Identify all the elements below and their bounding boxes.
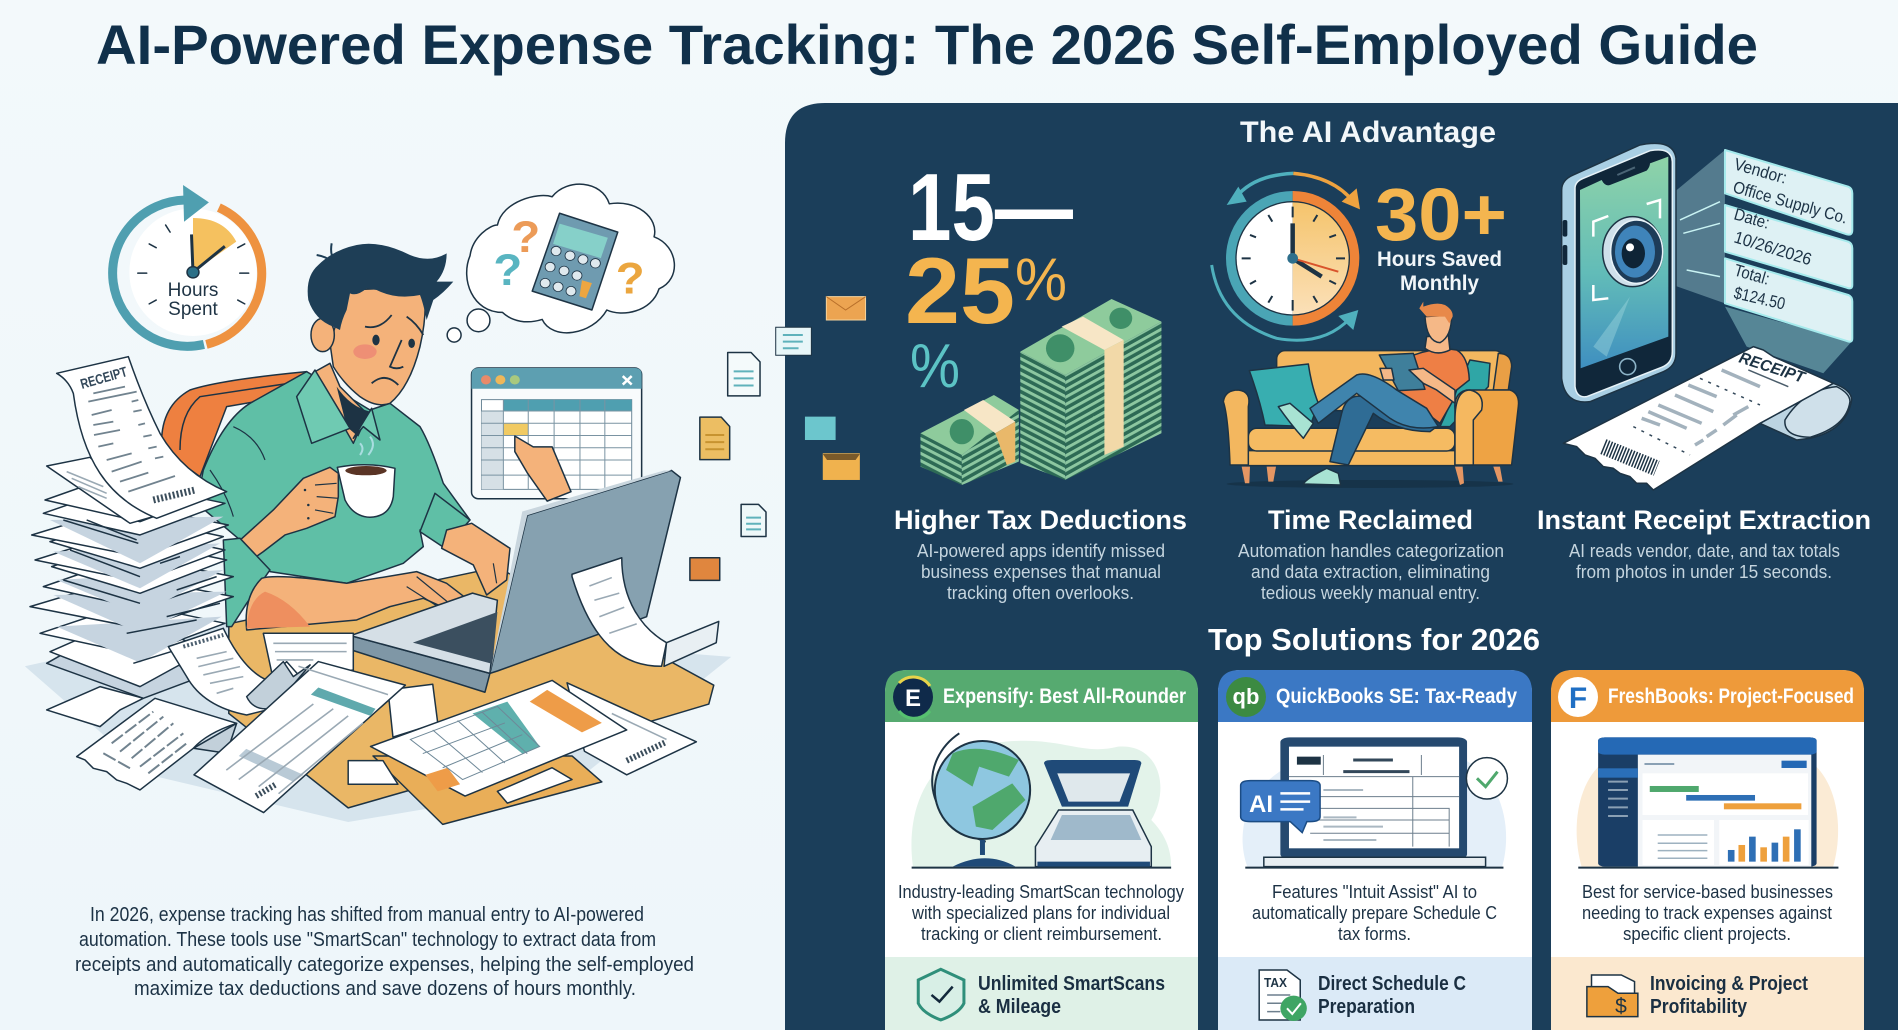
panel: time reclaimed illustration bbox=[1212, 173, 1519, 488]
extracted data panels bbox=[1725, 150, 1852, 342]
card description: tracking or client reimbursement. bbox=[921, 924, 1162, 944]
benefit: time reclaimed: Time Reclaimed bbox=[1268, 505, 1473, 535]
tax label: TAX bbox=[1264, 975, 1287, 990]
stat: 15-25 percent: 25 bbox=[905, 238, 1015, 343]
heading: top solutions: Top Solutions for 2026 bbox=[1208, 622, 1540, 657]
card description bbox=[1252, 882, 1497, 944]
benefit: time reclaimed: Automation handles categorization bbox=[1238, 541, 1504, 561]
card feature: Preparation bbox=[1318, 996, 1415, 1018]
intro paragraph: In 2026, expense tracking has shifted from manual entry to AI-powered bbox=[90, 904, 644, 926]
hours spent label: Hours bbox=[168, 280, 218, 301]
card footer bbox=[885, 957, 1198, 1030]
benefit: higher tax deductions: tracking often overlooks. bbox=[947, 583, 1134, 603]
card feature bbox=[1650, 973, 1808, 1018]
panel: FreshBooks card bbox=[1551, 670, 1864, 1030]
benefit: instant receipt extraction: from photos in under 15 seconds. bbox=[1576, 562, 1832, 582]
panel: left illustration of stressed freelancer bbox=[25, 184, 766, 824]
paper stack bbox=[30, 470, 233, 698]
benefit: time reclaimed: and data extraction, eliminating bbox=[1251, 562, 1490, 582]
icon: invoice folder bbox=[1587, 975, 1638, 1017]
card header bbox=[885, 670, 1198, 722]
man: arms and coffee cup bbox=[223, 437, 510, 630]
card description: Best for service-based businesses bbox=[1582, 882, 1833, 902]
card description: Features "Intuit Assist" AI to bbox=[1272, 882, 1477, 902]
icon: tax document bbox=[1259, 970, 1307, 1021]
card feature: Unlimited SmartScans bbox=[978, 973, 1165, 995]
chair bbox=[162, 372, 307, 477]
panel: phone scanning illustration bbox=[1562, 143, 1852, 490]
card title: FreshBooks: Project-Focused bbox=[1608, 685, 1854, 708]
loose receipts bbox=[47, 628, 353, 790]
hours spent label bbox=[168, 280, 219, 320]
card feature: Direct Schedule C bbox=[1318, 973, 1466, 995]
icon: documents crossing into the panel and cash stacks bbox=[776, 297, 1161, 485]
benefit: time reclaimed: tedious weekly manual entry. bbox=[1261, 583, 1480, 603]
stat: 15-25 percent: % bbox=[910, 332, 960, 401]
icon: thought bubble with calculator bbox=[447, 184, 674, 342]
intro paragraph: automation. These tools use "SmartScan" technology to extract data from bbox=[79, 929, 656, 951]
card title: QuickBooks SE: Tax-Ready bbox=[1276, 685, 1517, 708]
illustration: project dashboard bbox=[1577, 737, 1838, 868]
title: AI-Powered Expense Tracking: The 2026 Self-Employed Guide bbox=[96, 13, 1758, 76]
card footer bbox=[1218, 957, 1532, 1030]
benefit: higher tax deductions: AI-powered apps identify missed bbox=[917, 541, 1165, 561]
card footer bbox=[1551, 957, 1864, 1030]
receipt bbox=[1563, 347, 1852, 490]
benefit: higher tax deductions bbox=[894, 505, 1187, 603]
hours spent label: Spent bbox=[168, 299, 219, 320]
panel: Expensify card bbox=[885, 670, 1198, 1030]
logo: Expensify: E bbox=[905, 685, 921, 712]
logo: Expensify bbox=[893, 677, 933, 718]
stat: 30+ hours saved monthly: Monthly bbox=[1400, 272, 1479, 295]
card description: tax forms. bbox=[1338, 924, 1411, 944]
card description: needing to track expenses against bbox=[1582, 903, 1832, 923]
icon: hours spent clock bbox=[113, 185, 262, 346]
card feature: Invoicing & Project bbox=[1650, 973, 1808, 995]
receipt extraction labels: Total: bbox=[1732, 261, 1772, 289]
logo: FreshBooks: F bbox=[1569, 682, 1587, 715]
card description: specific client projects. bbox=[1623, 924, 1791, 944]
icon: man relaxing on sofa bbox=[1223, 302, 1519, 488]
receipt label on phone illustration: RECEIPT bbox=[1737, 350, 1808, 387]
AI label: AI bbox=[1249, 791, 1273, 818]
icon: shield bbox=[918, 969, 964, 1020]
benefit: higher tax deductions: Higher Tax Deductions bbox=[894, 505, 1187, 535]
heading: the AI advantage: The AI Advantage bbox=[1240, 116, 1496, 149]
illustration: globe and scanner bbox=[911, 733, 1171, 868]
intro paragraph: maximize tax deductions and save dozens of hours monthly. bbox=[134, 978, 636, 1000]
laptop with printed receipt bbox=[351, 470, 719, 692]
desk bbox=[229, 567, 714, 808]
receipt extraction labels: $124.50 bbox=[1732, 283, 1787, 314]
card feature: Profitability bbox=[1650, 996, 1748, 1018]
receipt extraction labels: 10/26/2026 bbox=[1732, 228, 1814, 269]
intro paragraph bbox=[75, 904, 694, 1000]
icon: thought bubble with calculator: ? bbox=[511, 211, 540, 262]
card feature bbox=[978, 973, 1165, 1018]
receipt title: RECEIPT bbox=[78, 363, 129, 392]
receipt extraction labels bbox=[1731, 155, 1850, 314]
illustration: laptop with tax form bbox=[1241, 737, 1507, 868]
benefit: instant receipt extraction bbox=[1537, 505, 1871, 582]
benefit: instant receipt extraction: AI reads vendor, date, and tax totals bbox=[1569, 541, 1840, 561]
card feature bbox=[1318, 973, 1466, 1018]
card description bbox=[898, 882, 1184, 944]
icon: stacks of cash bbox=[920, 299, 1161, 485]
floor shadow bbox=[25, 619, 731, 822]
card description bbox=[1582, 882, 1833, 944]
benefit: higher tax deductions: business expenses that manual bbox=[921, 562, 1161, 582]
card description: automatically prepare Schedule C bbox=[1252, 903, 1497, 923]
icon: spreadsheet window bbox=[472, 368, 642, 501]
benefit: instant receipt extraction: Instant Receipt Extraction bbox=[1537, 505, 1871, 535]
card description: Industry-leading SmartScan technology bbox=[898, 882, 1184, 902]
icon: thought bubble with calculator: ? bbox=[493, 244, 522, 295]
panel: QuickBooks card bbox=[1218, 670, 1532, 1030]
receipt on top of the stack bbox=[47, 357, 227, 523]
dollar sign: $ bbox=[1615, 995, 1627, 1018]
icon: floating documents bbox=[690, 352, 766, 580]
panel: dark background bbox=[785, 103, 1898, 1030]
intro paragraph: receipts and automatically categorize expenses, helping the self-employed bbox=[75, 954, 694, 976]
icon: floating documents bbox=[776, 297, 866, 480]
receipt extraction labels: Office Supply Co. bbox=[1731, 178, 1850, 228]
loose invoices and envelope bbox=[194, 662, 696, 824]
icon: phone bbox=[1562, 143, 1852, 402]
stat: 30+ hours saved monthly: 30+ bbox=[1375, 173, 1507, 256]
stat: 30+ hours saved monthly bbox=[1375, 173, 1507, 295]
logo: FreshBooks bbox=[1558, 677, 1598, 717]
logo: QuickBooks bbox=[1226, 677, 1266, 717]
benefit: time reclaimed bbox=[1238, 505, 1504, 603]
stat: 15-25 percent: % bbox=[1015, 246, 1067, 313]
icon: thought bubble with calculator: ? bbox=[616, 253, 645, 303]
stat: 15-25 percent bbox=[905, 154, 1073, 401]
receipt extraction labels: Vendor: bbox=[1732, 155, 1789, 188]
card header bbox=[1551, 670, 1864, 722]
card description: with specialized plans for individual bbox=[911, 903, 1170, 923]
card title: Expensify: Best All-Rounder bbox=[943, 685, 1186, 708]
stat: 15-25 percent: 15— bbox=[908, 154, 1073, 261]
stat: 30+ hours saved monthly: Hours Saved bbox=[1377, 248, 1502, 271]
card feature: & Mileage bbox=[978, 996, 1061, 1018]
receipt extraction labels: Date: bbox=[1732, 205, 1772, 233]
card header bbox=[1218, 670, 1532, 722]
man: torso and head bbox=[197, 243, 470, 583]
logo: QuickBooks: qb bbox=[1233, 684, 1259, 709]
icon: clock with arrows bbox=[1212, 173, 1360, 340]
